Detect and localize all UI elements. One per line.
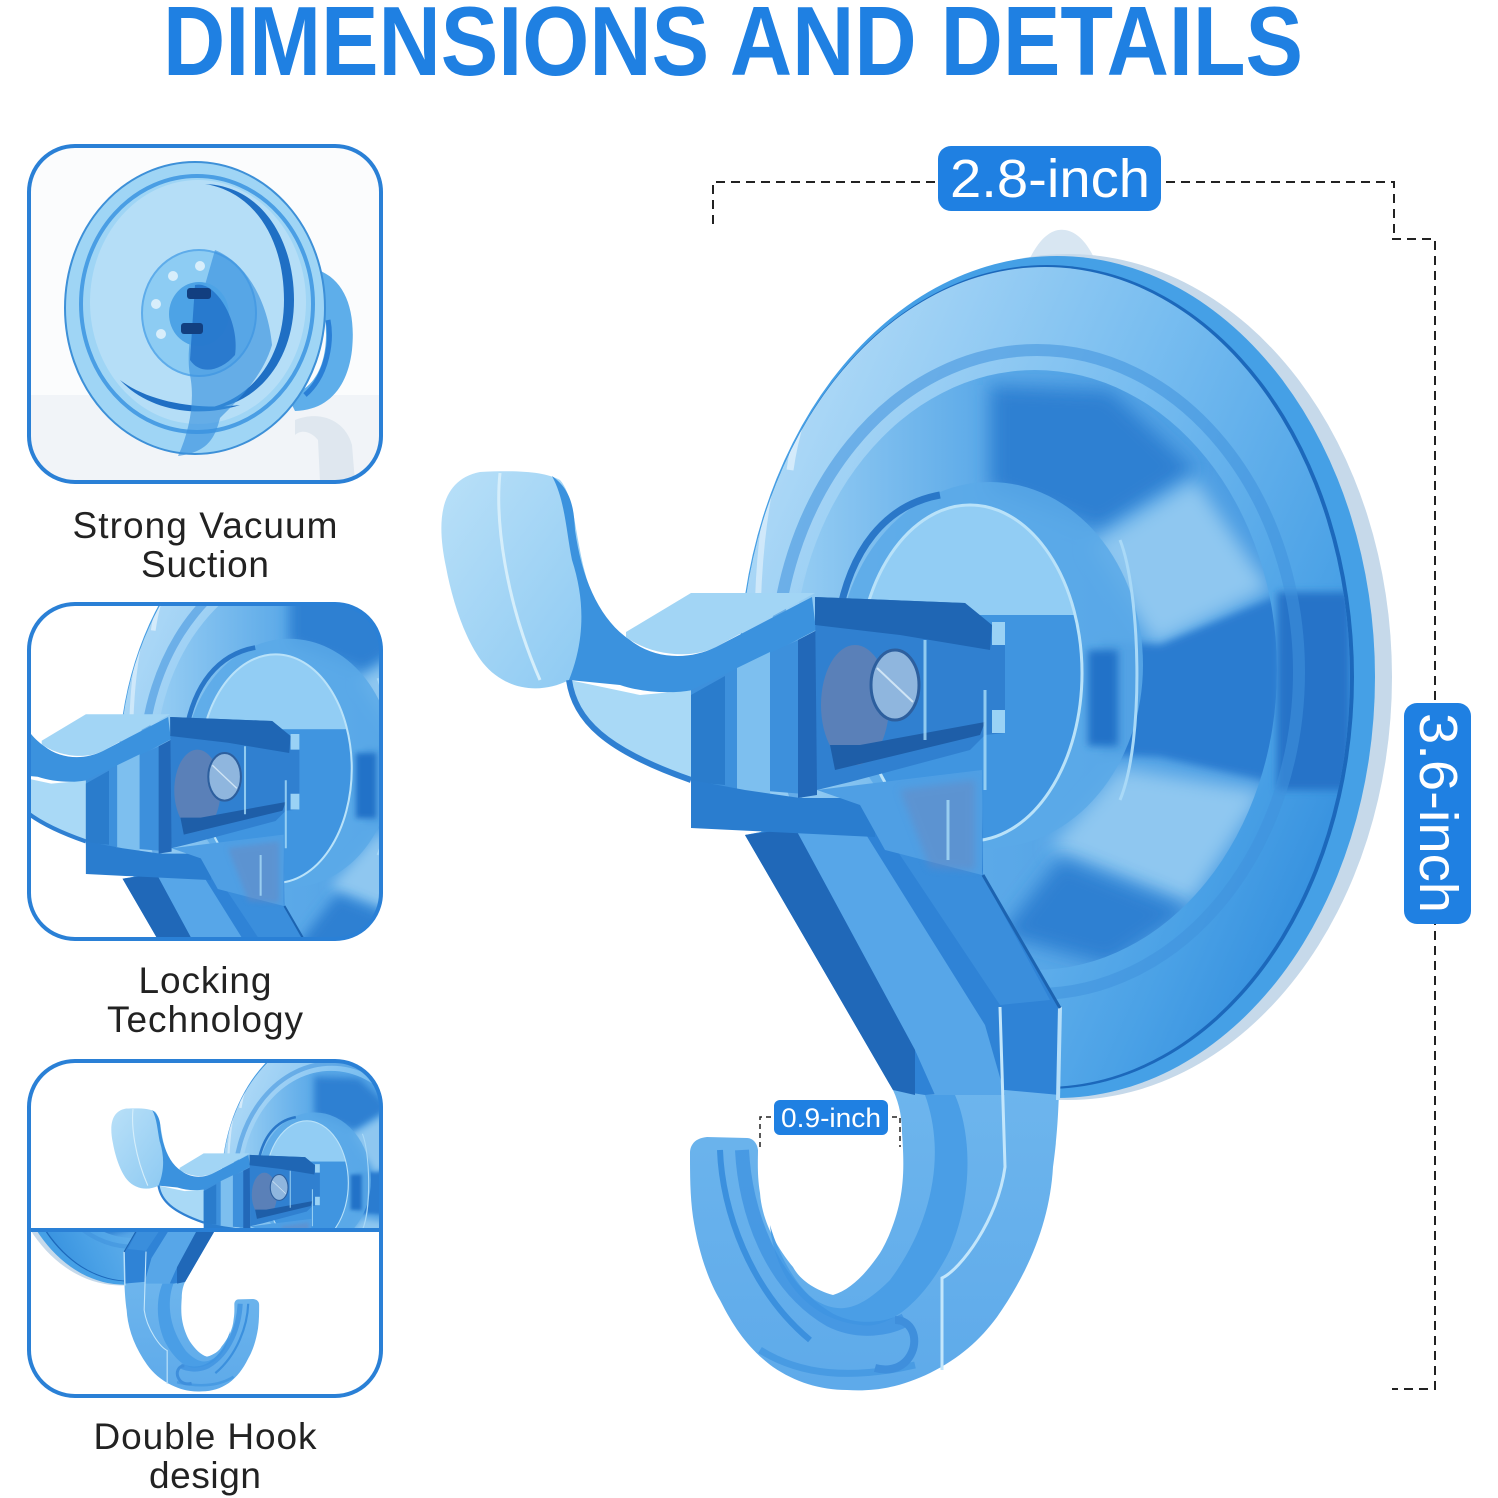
- main product: suction disc: [739, 230, 1392, 1100]
- icon: suction hook front view: [65, 162, 353, 456]
- dimension: height 3.6-inch: 3.6-inch: [1408, 713, 1468, 913]
- dimension: width 2.8-inch: [713, 146, 1394, 238]
- main product: double hook: [441, 471, 1060, 1390]
- caption: double hook design: design: [149, 1455, 261, 1496]
- caption: locking technology: Locking: [138, 960, 272, 1001]
- caption: strong vacuum suction: Suction: [141, 544, 269, 585]
- dimension: hook opening 0.9-inch: 0.9-inch: [781, 1103, 881, 1133]
- caption: double hook design: Double Hook: [94, 1416, 317, 1457]
- caption: locking technology: Technology: [107, 999, 304, 1040]
- panel: strong vacuum suction: [29, 146, 381, 485]
- dimension: height 3.6-inch: [1392, 239, 1471, 1389]
- caption: strong vacuum suction: Strong Vacuum: [72, 505, 338, 546]
- panel: locking technology: [27, 602, 383, 941]
- dimension: hook opening 0.9-inch: [760, 1100, 900, 1147]
- dimension: width 2.8-inch: 2.8-inch: [950, 149, 1150, 209]
- panel: double hook design: [27, 1059, 383, 1398]
